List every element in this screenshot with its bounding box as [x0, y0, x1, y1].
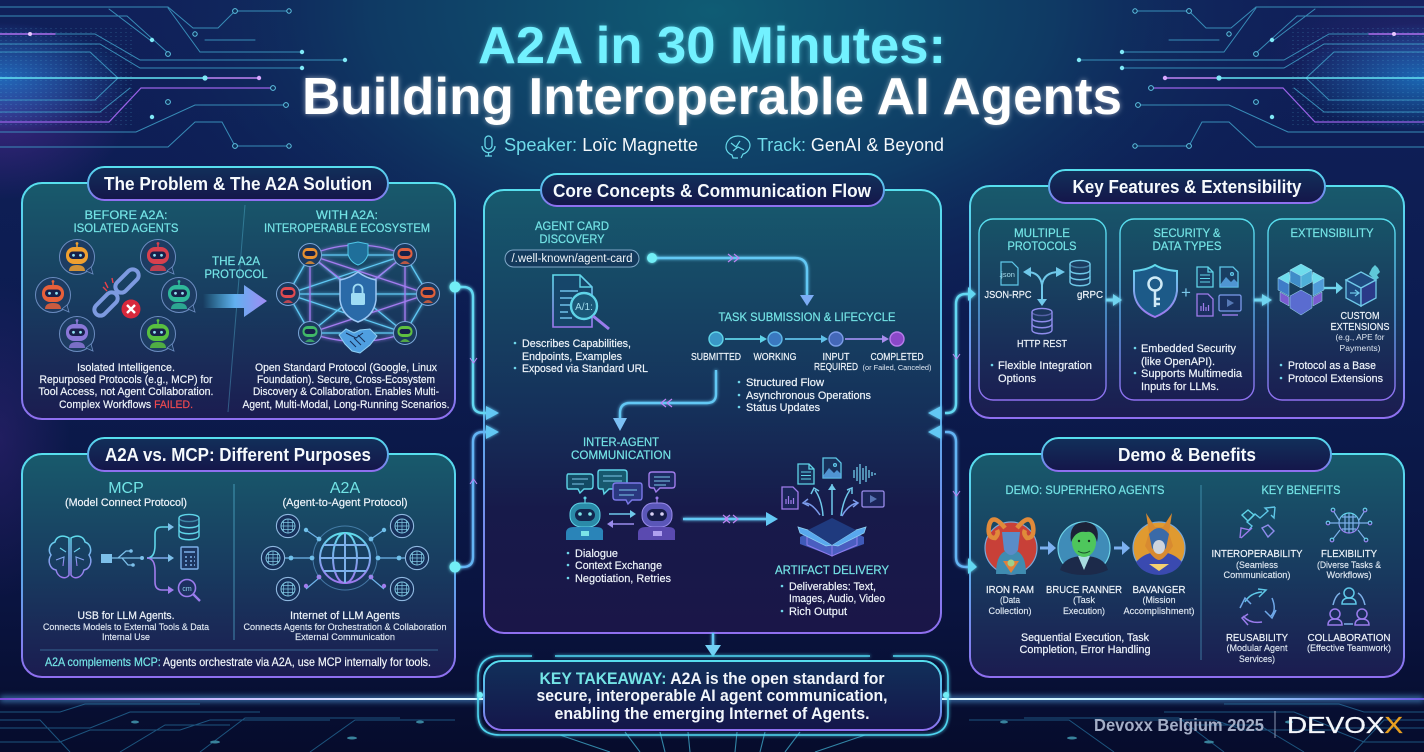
icon: microphone [482, 136, 495, 156]
card: security and data types: (like OpenAPI). [1141, 356, 1215, 368]
hero captions: Collection) [988, 606, 1032, 617]
with text: Open Standard Protocol (Google, Linux [255, 362, 437, 374]
card: multiple protocols: PROTOCOLS [1008, 239, 1076, 253]
arrow: the A2A protocol: THE A2A [212, 254, 260, 268]
icon: globe with agent nodes [261, 514, 429, 601]
benefit captions top: INTEROPERABILITY [1212, 549, 1303, 560]
heading pill: The Problem & The A2A Solution [104, 173, 372, 194]
lifecycle bullets: Asynchronous Operations [746, 390, 871, 402]
MCP heading: MCP [108, 480, 144, 497]
footer circuit and horizon line [0, 696, 1424, 752]
icon: shield with key [1134, 265, 1177, 317]
card: extensibility: Payments) [1340, 343, 1381, 353]
arrow: core panel to takeaway [705, 633, 721, 657]
icon: handshake [339, 329, 377, 353]
before heading: ISOLATED AGENTS [74, 221, 178, 235]
lifecycle stepper: SUBMITTED [691, 352, 741, 363]
card: extensibility: Protocol as a Base [1288, 360, 1376, 372]
card: multiple protocols: HTTP REST [1017, 339, 1068, 350]
hero captions: IRON RAM [986, 585, 1034, 596]
icon: broken chain [92, 267, 141, 318]
lifecycle bullets [738, 377, 871, 414]
lifecycle stepper: COMPLETED [870, 352, 924, 363]
with text: Discovery & Collaboration. Enables Multi- [253, 386, 439, 398]
title line 1: A2A in 30 Minutes: [478, 17, 946, 75]
inter-agent bullets: Dialogue [575, 548, 618, 560]
callout: key takeaway [477, 656, 949, 735]
task lifecycle heading: TASK SUBMISSION & LIFECYCLE [718, 310, 896, 324]
card connectors [1106, 294, 1272, 306]
well-known url pill: /.well-known/agent-card [512, 253, 632, 265]
hero captions: Accomplishment) [1124, 606, 1194, 617]
with text: Agent, Multi-Modal, Long-Running Scenarios. [242, 399, 450, 411]
heading pill: Demo & Benefits [1118, 444, 1256, 465]
icon: protocol fork: .json [999, 270, 1015, 279]
MCP text: USB for LLM Agents. [78, 610, 174, 622]
lifecycle bullets: Status Updates [746, 402, 820, 414]
before text: Tool Access, not Agent Collaboration. [38, 386, 214, 398]
icon: search [178, 580, 200, 601]
card: multiple protocols: Flexible Integration [998, 360, 1092, 372]
icon: central shield with lock [340, 272, 376, 322]
benefits heading: KEY BENEFITS [1262, 483, 1340, 497]
icon: interoperability [1240, 507, 1275, 538]
before heading [74, 208, 178, 235]
MCP text [43, 610, 210, 643]
well-known url pill [505, 250, 639, 267]
A2A heading: (Agent-to-Agent Protocol) [282, 497, 408, 509]
inter-agent heading: INTER-AGENT [583, 435, 660, 449]
artifact bullets: Rich Output [789, 606, 848, 618]
agent card bullets [514, 338, 648, 375]
icon: reusability [1240, 589, 1276, 625]
heading pill: Key Features & Extensibility [1072, 176, 1302, 197]
icon: Bruce Ranner hero [1058, 522, 1110, 575]
conference label: Devoxx Belgium 2025 [1094, 715, 1264, 735]
with text: Foundation). Secure, Cross-Ecosystem [257, 374, 435, 386]
lifecycle stepper: WORKING [754, 352, 796, 363]
demo heading: DEMO: SUPERHERO AGENTS [1006, 483, 1164, 497]
arrow: communication to artifact [683, 512, 778, 526]
arrow [1114, 541, 1130, 555]
card: multiple protocols: JSON-RPC [984, 290, 1032, 301]
panel: demo and benefits [970, 438, 1404, 677]
card: security and data types: + [1181, 283, 1191, 302]
with heading: INTEROPERABLE ECOSYSTEM [264, 221, 430, 235]
card: security and data types: DATA TYPES [1152, 239, 1222, 253]
benefit captions bottom: REUSABILITY [1226, 633, 1288, 644]
takeaway text: enabling the emerging Internet of Agents. [554, 705, 870, 723]
icon: chatting robots [566, 470, 675, 540]
hero captions: (Mission [1142, 595, 1176, 606]
footer branding [1094, 711, 1403, 738]
A2A text: External Communication [295, 632, 395, 643]
card: extensibility: CUSTOM [1340, 311, 1380, 322]
demo summary: Completion, Error Handling [1020, 644, 1150, 656]
before heading: BEFORE A2A: [84, 208, 168, 222]
agent card bullets: Describes Capabilities, [522, 338, 631, 350]
heading pill: A2A vs. MCP: Different Purposes [105, 444, 371, 465]
icon: usb connector [101, 549, 144, 567]
artifact bullets: Images, Audio, Video [789, 593, 885, 605]
heading pill: Core Concepts & Communication Flow [553, 180, 872, 201]
icon: data types [1197, 267, 1241, 316]
panel: the problem and the A2A solution [22, 167, 455, 419]
lifecycle bullets: Structured Flow [746, 377, 825, 389]
icon: brain [49, 536, 91, 578]
A2A text [244, 610, 446, 643]
icon: Bavanger hero [1133, 513, 1185, 575]
panel: core concepts and communication flow [484, 174, 941, 633]
summary line: A2A complements MCP: Agents orchestrate via A2A, use MCP internally for tools. [45, 655, 431, 669]
takeaway text: KEY TAKEAWAY: A2A is the open standard for [540, 670, 885, 688]
heading pill [1042, 438, 1331, 471]
lifecycle stepper: INPUT [822, 352, 850, 363]
A2A text: Internet of LLM Agents [290, 610, 400, 622]
inter-agent heading [571, 435, 671, 462]
MCP text: Internal Use [102, 632, 150, 643]
title line 2: Building Interoperable AI Agents [302, 68, 1122, 126]
benefit captions bottom: (Effective Teamwork) [1307, 643, 1391, 654]
card: extensibility: EXTENSIONS [1330, 322, 1390, 333]
card: multiple protocols: Options [998, 373, 1036, 385]
icon: document with magnifier: A/1: [575, 302, 593, 313]
benefit captions top: (Seamless [1236, 560, 1278, 571]
hero captions: BRUCE RANNER [1046, 585, 1122, 596]
card: multiple protocols: gRPC [1077, 290, 1103, 301]
takeaway text: secure, interoperable AI agent communication, [536, 687, 888, 705]
benefit captions top: (Diverse Tasks & [1317, 560, 1382, 571]
hero captions: Execution) [1063, 606, 1105, 617]
circuit decoration right [1077, 7, 1424, 148]
agent card heading [535, 219, 609, 246]
hero captions: (Data [1000, 595, 1021, 606]
lifecycle stepper [691, 332, 932, 373]
before text: Repurposed Protocols (e.g., MCP) for [40, 374, 213, 386]
card: security and data types: Supports Multimedia [1141, 368, 1243, 380]
with heading [264, 208, 430, 235]
speaker and track line [482, 135, 944, 158]
card: security and data types: Embedded Security [1141, 343, 1236, 355]
panel: A2A vs MCP [22, 438, 455, 677]
card: extensibility: EXTENSIBILITY [1290, 226, 1374, 240]
before text: Complex Workflows FAILED. [59, 399, 193, 411]
arrow: task to inter-agent [613, 370, 716, 431]
inter-agent bullets: Negotiation, Retries [575, 573, 671, 585]
icon: extension box [1346, 265, 1380, 306]
icon: database [179, 514, 199, 540]
with text [242, 362, 450, 411]
icon: protocol fork [999, 260, 1090, 334]
isolated robots [36, 240, 196, 352]
card: extensibility: (e.g., APE for [1336, 332, 1385, 342]
connector: feature panels to core panel [928, 287, 977, 574]
benefit captions top [1212, 549, 1382, 581]
artifact bullets [781, 581, 885, 618]
circuit decoration left [0, 7, 347, 148]
with heading: WITH A2A: [316, 208, 378, 222]
heading pill [88, 167, 388, 200]
heading pill [1049, 170, 1325, 203]
arrow: discovery to task [647, 253, 814, 306]
icon: collaboration [1328, 588, 1369, 625]
inter-agent bullets: Context Exchange [575, 560, 662, 572]
demo summary [1020, 632, 1150, 656]
A2A text: Connects Agents for Orchestration & Collaboration [244, 622, 446, 633]
icon: document with magnifier [553, 275, 609, 329]
inter-agent heading: COMMUNICATION [571, 448, 671, 462]
agent card bullets: Exposed via Standard URL [522, 363, 648, 375]
icon: Iron Ram hero [985, 519, 1037, 574]
hero captions: BAVANGER [1132, 585, 1186, 596]
icon: flexibility [1326, 508, 1372, 542]
MCP heading [65, 480, 187, 509]
before text: Isolated Intelligence. [77, 362, 175, 374]
network diagram [276, 242, 440, 353]
agent card heading: DISCOVERY [540, 232, 604, 246]
benefit captions bottom: COLLABORATION [1308, 633, 1390, 644]
benefit captions bottom: (Modular Agent [1226, 643, 1288, 654]
card: security and data types [1120, 219, 1254, 400]
before text [38, 362, 214, 411]
benefit captions top: Workflows) [1326, 570, 1372, 581]
card: multiple protocols: MULTIPLE [1014, 226, 1070, 240]
connector: problem panel to core panel [450, 282, 499, 572]
icon: artifact outputs [782, 458, 884, 509]
inter-agent bullets [567, 548, 671, 585]
speaker text: Speaker: Loïc Magnette [504, 135, 698, 155]
A2A heading: A2A [330, 480, 360, 497]
card: multiple protocols [979, 219, 1106, 400]
heading pill [541, 174, 884, 206]
lifecycle stepper: (or Failed, Canceled) [862, 363, 932, 372]
card: security and data types: SECURITY & [1154, 226, 1220, 240]
card: extensibility [1268, 219, 1395, 400]
icon: cubes [1278, 264, 1324, 315]
track text: Track: GenAI & Beyond [757, 135, 944, 155]
arrow: the A2A protocol: PROTOCOL [204, 267, 268, 281]
MCP text: Connects Models to External Tools & Data [43, 622, 210, 633]
panel: key features and extensibility [970, 170, 1404, 418]
title [302, 17, 1122, 126]
arrow: the A2A protocol [203, 254, 268, 317]
arrow [1040, 541, 1056, 555]
MCP heading: (Model Connect Protocol) [65, 497, 187, 509]
arrow: to custom extension [1324, 282, 1343, 294]
agent card bullets: Endpoints, Examples [522, 351, 622, 363]
artifact bullets: Deliverables: Text, [789, 581, 876, 593]
benefit captions top: FLEXIBILITY [1321, 549, 1377, 560]
icon: search: cm [182, 586, 192, 593]
icon: brain [726, 136, 750, 158]
agent card heading: AGENT CARD [535, 219, 609, 233]
benefit captions bottom [1226, 633, 1391, 665]
benefit captions top: Communication) [1224, 570, 1290, 581]
logo: Devoxx: DEVOX X [1287, 712, 1403, 738]
A2A heading [282, 480, 408, 509]
takeaway text [536, 670, 888, 723]
icon: calculator [181, 547, 198, 569]
benefit captions bottom: Services) [1239, 654, 1275, 665]
lifecycle stepper: REQUIRED [814, 362, 858, 373]
artifact heading: ARTIFACT DELIVERY [775, 563, 889, 577]
card: extensibility: Protocol Extensions [1288, 373, 1383, 385]
hero captions [986, 585, 1194, 617]
card: security and data types: Inputs for LLMs. [1141, 381, 1219, 393]
hero captions: (Task [1073, 595, 1095, 606]
icon: top shield [348, 242, 368, 265]
branching arrows [147, 523, 174, 594]
heading pill [88, 438, 388, 471]
icon: artifact box [798, 484, 866, 556]
demo summary: Sequential Execution, Task [1021, 632, 1149, 644]
